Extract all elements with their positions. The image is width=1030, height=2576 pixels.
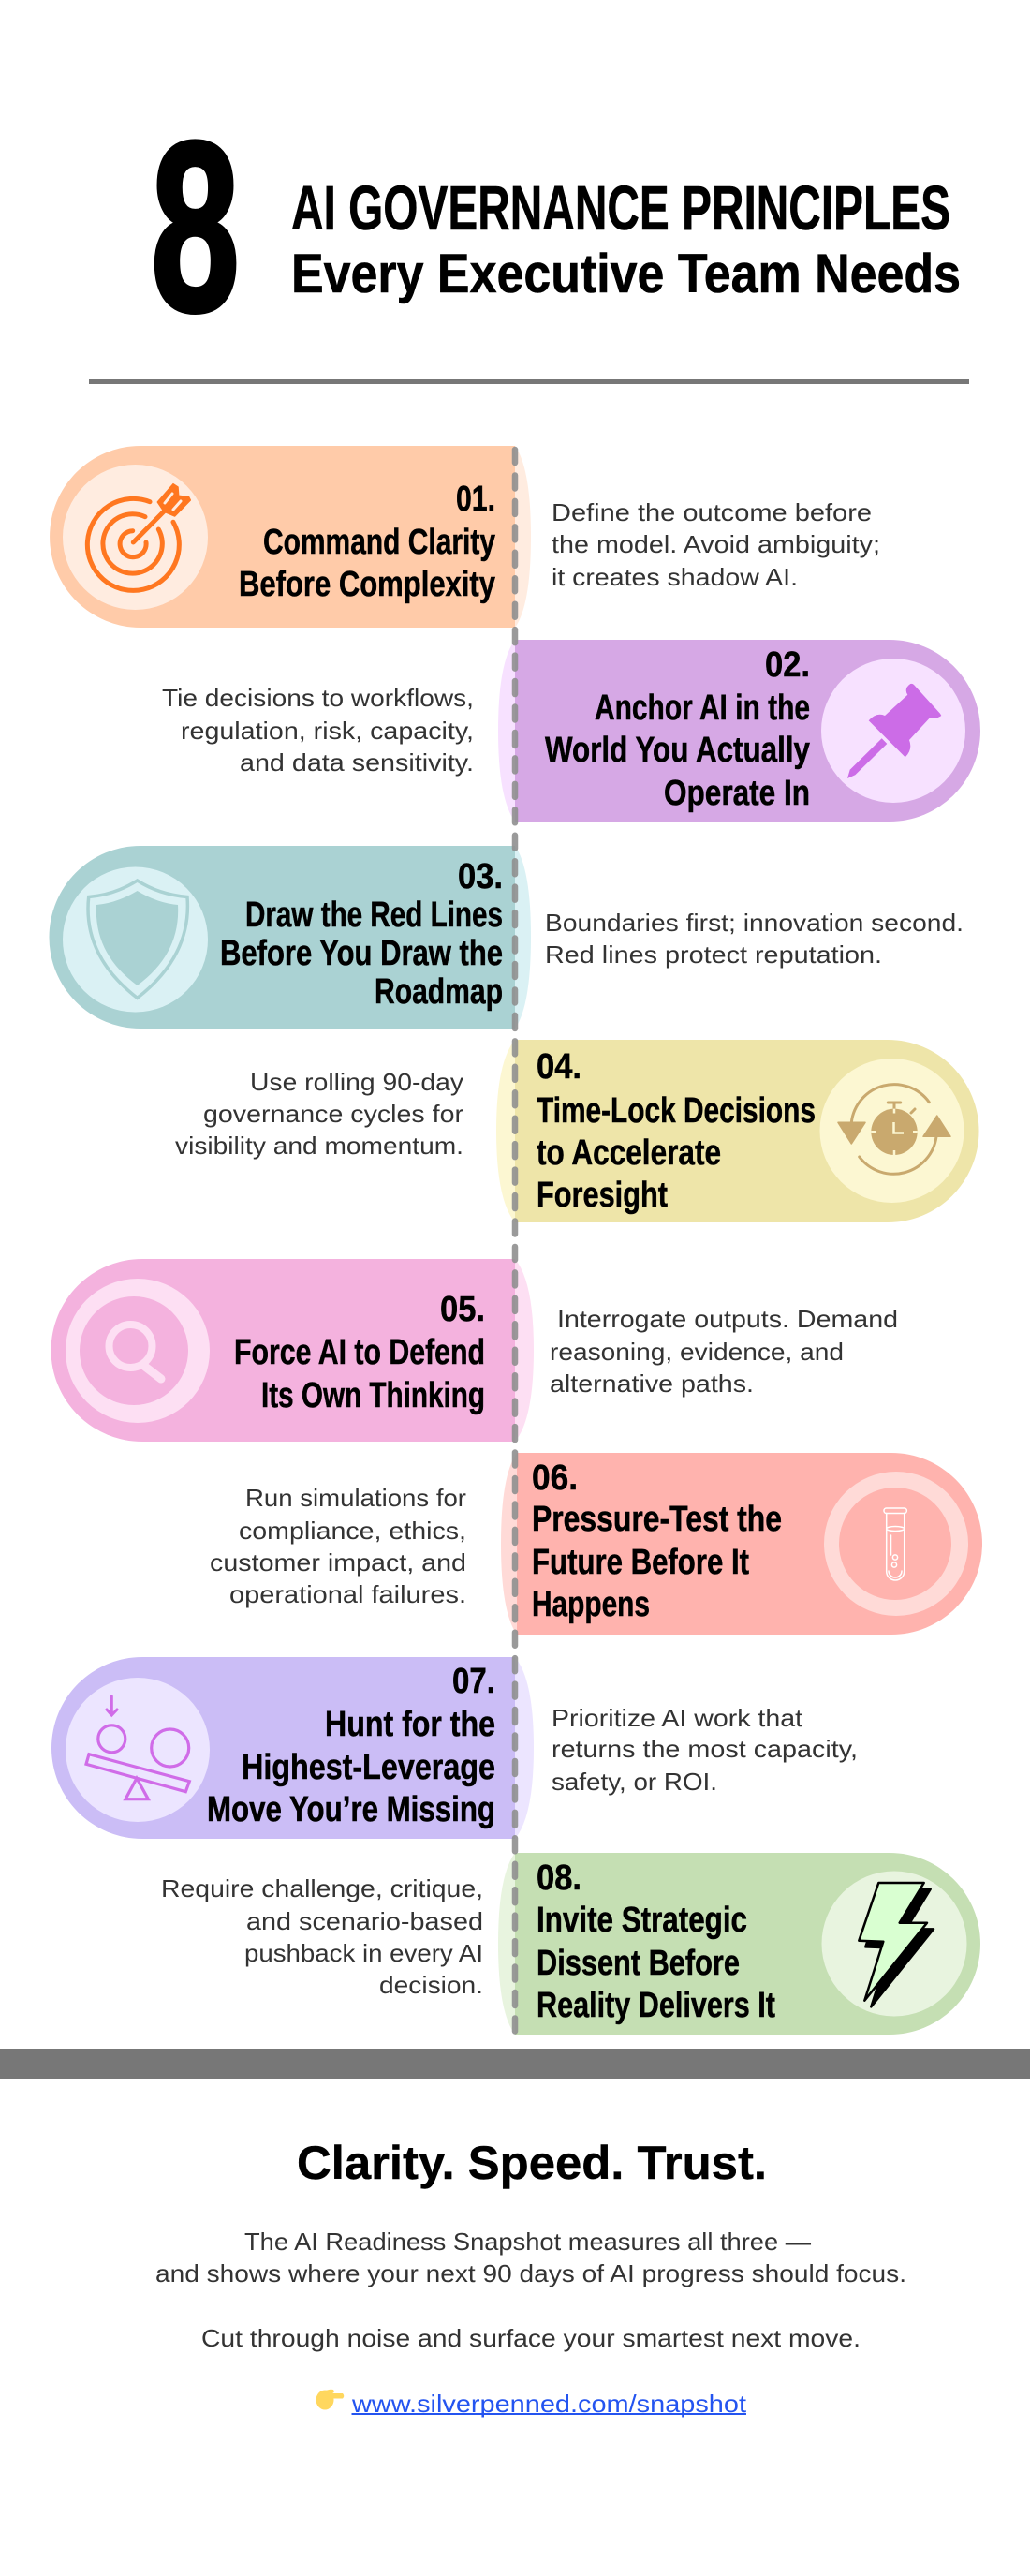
icon: shield: [88, 881, 187, 998]
panel 03: Draw the Red Lines: [50, 846, 964, 1029]
description 05: alternative paths.: [550, 1369, 754, 1398]
pill 05: [52, 1259, 534, 1442]
description 03: Red lines protect reputation.: [545, 940, 882, 969]
heading 02: 02.: [765, 645, 810, 685]
closing body text: Cut through noise and surface your smartest next move.: [201, 2324, 861, 2352]
description 07: [552, 1704, 858, 1796]
heading 03: Draw the Red Lines: [245, 896, 503, 935]
description 02: and data sensitivity.: [240, 748, 474, 777]
panel 01: Command Clarity: [50, 446, 880, 628]
heading 04: Foresight: [537, 1176, 668, 1215]
heading 08: Invite Strategic: [537, 1901, 747, 1940]
heading 02: Operate In: [664, 774, 810, 813]
description 05: reasoning, evidence, and: [550, 1338, 844, 1366]
heading 06: [532, 1458, 782, 1624]
heading 06: Happens: [532, 1585, 650, 1624]
pill 02: [498, 640, 980, 822]
heading 05: Force AI to Defend: [234, 1333, 485, 1372]
heading 04: to Accelerate: [537, 1133, 721, 1173]
heading 03: [220, 857, 503, 1012]
heading 08: [537, 1858, 775, 2025]
description 06: compliance, ethics,: [239, 1517, 466, 1545]
description 04: visibility and momentum.: [175, 1132, 464, 1160]
heading 01: Command Clarity: [263, 523, 495, 562]
title line 2: Every Executive Team Needs: [291, 244, 961, 304]
description 07: Prioritize AI work that: [552, 1704, 803, 1732]
footer divider band: [0, 2049, 1030, 2079]
heading 07: [207, 1662, 495, 1829]
heading 03: 03.: [458, 857, 503, 896]
description 06: [210, 1484, 466, 1608]
heading 08: 08.: [537, 1858, 581, 1898]
snapshot link: www.silverpenned.com/snapshot: [351, 2390, 747, 2418]
heading 01: 01.: [456, 480, 495, 519]
icon: test tube: [884, 1508, 906, 1580]
description 08: Require challenge, critique,: [161, 1874, 483, 1902]
description 07: returns the most capacity,: [552, 1735, 858, 1763]
heading 05: [234, 1290, 485, 1415]
description 04: [175, 1068, 464, 1160]
description 02: Tie decisions to workflows,: [162, 684, 474, 712]
icon: pointing hand: [316, 2390, 344, 2409]
heading 06: Pressure-Test the: [532, 1500, 782, 1539]
heading 06: Future Before It: [532, 1543, 749, 1582]
heading 02: Anchor AI in the: [595, 688, 810, 728]
heading 07: Highest-Leverage: [242, 1748, 495, 1787]
heading 01: Before Complexity: [239, 565, 495, 604]
description 06: customer impact, and: [210, 1548, 466, 1577]
description 04: governance cycles for: [203, 1100, 464, 1128]
panel 05: Force AI to Defend: [52, 1259, 898, 1442]
description 03: [545, 909, 964, 969]
description 06: Run simulations for: [245, 1484, 466, 1512]
heading 07: Hunt for the: [325, 1705, 495, 1744]
icon: magnifying glass: [109, 1325, 161, 1379]
description 08: [161, 1874, 483, 1999]
description 08: pushback in every AI: [244, 1939, 483, 1967]
heading 07: Move You’re Missing: [207, 1790, 495, 1829]
heading 08: Reality Delivers It: [537, 1986, 775, 2025]
heading 04: [537, 1047, 816, 1215]
dashed timeline spine: [512, 450, 518, 2035]
icon: balance seesaw: [86, 1696, 189, 1799]
description 06: operational failures.: [229, 1580, 466, 1608]
panel 06: Pressure-Test the Future: [210, 1453, 982, 1635]
heading 02: World You Actually: [545, 731, 810, 770]
closing body text: and shows where your next 90 days of AI progress should focus.: [155, 2259, 906, 2287]
heading 06: 06.: [532, 1458, 578, 1498]
panel 08: Invite Strategic Dissent: [161, 1853, 980, 2035]
description 03: Boundaries first; innovation second.: [545, 909, 964, 937]
heading 04: Time-Lock Decisions: [537, 1091, 816, 1131]
description 01: [552, 498, 880, 591]
heading 04: 04.: [537, 1047, 581, 1087]
pill 08: [498, 1853, 980, 2035]
pill 06: [501, 1453, 982, 1635]
pill 01: [50, 446, 531, 628]
icon: stopwatch with cycle arrows: [838, 1085, 950, 1174]
icon: lightning bolt: [859, 1883, 934, 2006]
icon: target with arrow: [87, 484, 190, 590]
heading 03: Before You Draw the: [220, 934, 503, 973]
heading 02: [545, 645, 810, 813]
heading 07: 07.: [452, 1662, 495, 1701]
description 01: it creates shadow AI.: [552, 563, 798, 591]
closing body text: The AI Readiness Snapshot measures all three —: [244, 2228, 811, 2256]
pill 04: [496, 1040, 979, 1222]
panel 07: Hunt for the Highest-Leverage Move: [52, 1657, 858, 1839]
description 02: [162, 684, 474, 777]
description 08: and scenario-based: [246, 1907, 483, 1935]
icon: push pin: [847, 684, 941, 778]
description 01: the model. Avoid ambiguity;: [552, 530, 880, 558]
description 05: Interrogate outputs. Demand: [557, 1305, 898, 1333]
closing headline: Clarity. Speed. Trust.: [297, 2137, 767, 2189]
description 01: Define the outcome before: [552, 498, 872, 526]
description 05: [550, 1305, 898, 1398]
panel 04: Time-Lock Decisions: [175, 1040, 979, 1222]
header title: [151, 91, 961, 362]
closing body text: [155, 2228, 906, 2352]
description 08: decision.: [379, 1971, 483, 1999]
heading 03: Roadmap: [375, 972, 503, 1012]
closing call to action: [155, 2137, 906, 2418]
heading 01: [239, 480, 495, 604]
heading 05: Its Own Thinking: [261, 1376, 485, 1415]
heading 05: 05.: [440, 1290, 485, 1329]
big numeral 8: 8: [151, 91, 240, 362]
description 04: Use rolling 90-day: [250, 1068, 464, 1096]
heading 08: Dissent Before: [537, 1944, 740, 1983]
panel 02: Anchor AI: [162, 640, 980, 822]
pill 07: [52, 1657, 534, 1839]
description 02: regulation, risk, capacity,: [181, 717, 474, 745]
pill 03: [50, 846, 531, 1029]
description 07: safety, or ROI.: [552, 1768, 717, 1796]
